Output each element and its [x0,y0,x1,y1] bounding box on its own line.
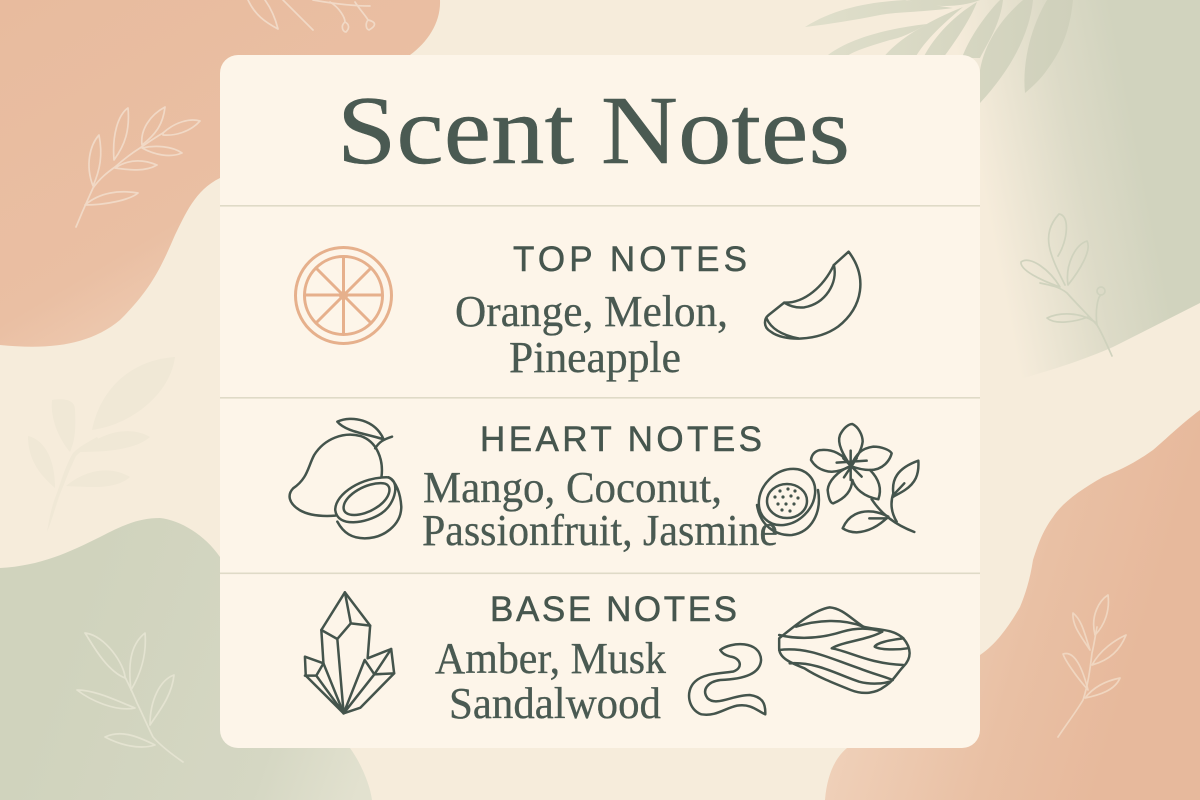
icon: passionfruit [747,457,827,537]
sprig: bottom left outline [77,633,183,762]
panel: scent notes card [220,55,980,748]
peach blob: bottom right [825,410,1200,800]
section: top notes [296,240,860,382]
text: top notes list: Orange, Melon, [455,287,728,336]
sage blob: bottom left [0,518,372,800]
icon: jasmine flower [811,424,918,532]
icon: melon slice [765,252,860,339]
text: base notes list: Sandalwood [449,679,661,728]
text: heart notes list: Passionfruit, Jasmine [422,506,778,555]
section: heart notes [290,419,918,555]
heading: base notes: BASE NOTES [490,590,737,629]
heading: top notes: TOP NOTES [513,240,747,279]
text: heart notes list [422,463,778,555]
text: heart notes list: Mango, Coconut, [423,463,722,512]
sprig: right outline [1021,214,1112,356]
sprig: top left outline [76,107,200,227]
icon: orange slice [296,248,392,344]
text: top notes list [455,287,728,382]
section: base notes [305,590,910,728]
text: base notes list: Amber, Musk [435,634,666,683]
icon: musk swirl [689,644,765,715]
sprig: left filled [28,357,175,532]
sprig: top centre outline [248,0,374,32]
sage blob: top right [950,0,1200,395]
icon: amber crystal [305,592,394,713]
peach blob: top left [0,0,440,347]
palm leaf: top right [805,0,1073,103]
sprig: bottom right outline [1058,595,1126,737]
icon: sandalwood piece [779,607,910,693]
title: Scent Notes [337,77,850,184]
icon: mango and coconut [290,419,401,538]
text: base notes list [435,634,666,728]
text: top notes list: Pineapple [509,333,681,382]
heading: heart notes: HEART NOTES [480,420,762,459]
